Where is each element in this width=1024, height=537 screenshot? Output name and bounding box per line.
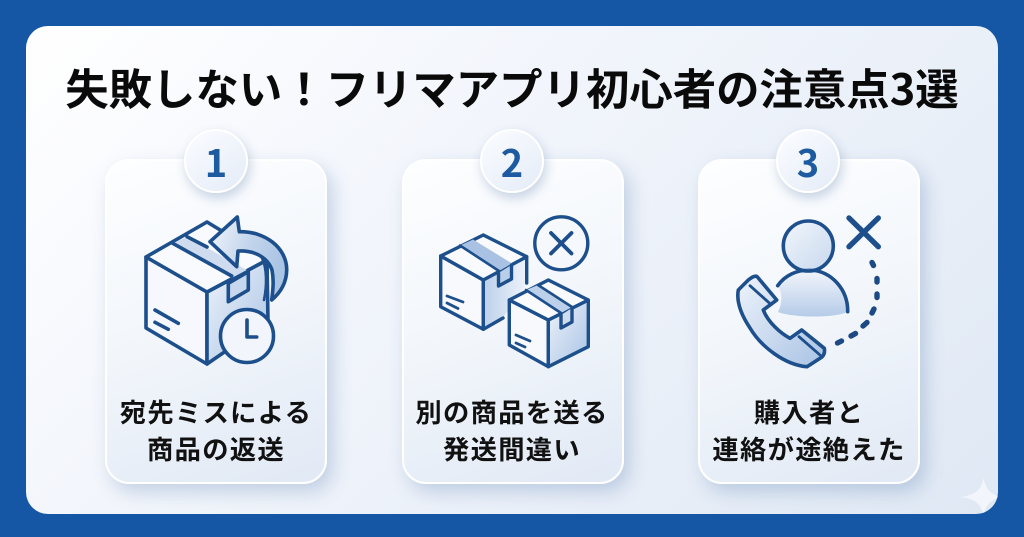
- front box: [509, 300, 548, 367]
- return arrow: [210, 217, 287, 300]
- number badge 2: [480, 129, 544, 193]
- number badge 2: 2: [501, 133, 523, 188]
- title: 失敗しない！フリマアプリ初心者の注意点3選: [65, 56, 959, 118]
- icon: returned box with clock: [146, 217, 287, 364]
- card 3 label: 購入者と: [754, 391, 864, 430]
- card 1 label: 宛先ミスによる: [120, 391, 312, 430]
- box tape tab: [228, 272, 248, 302]
- icon: person, phone and broken link: [738, 218, 878, 367]
- card 3 label: 連絡が途絶えた: [712, 428, 906, 467]
- cross mark: [849, 218, 878, 247]
- dotted path: [838, 262, 877, 343]
- card 1 label: 商品の返送: [147, 428, 285, 467]
- clock: [220, 310, 274, 362]
- person body: [778, 270, 848, 317]
- number badge 1: [184, 129, 248, 193]
- card 2 label: [415, 391, 609, 467]
- panel: card 1: [105, 159, 327, 484]
- box body: [146, 257, 207, 364]
- card 1 label: [120, 391, 312, 467]
- panel: card 3: [698, 159, 920, 484]
- cross circle: [535, 217, 588, 270]
- number badge 3: [776, 129, 840, 193]
- card 2 label: 別の商品を送る: [415, 391, 609, 430]
- card 2 label: 発送間違い: [443, 428, 581, 467]
- number badge 3: 3: [797, 133, 819, 188]
- box tape: [173, 237, 247, 278]
- panel: card 2: [402, 159, 624, 484]
- card 3 label: [712, 391, 906, 467]
- person head: [783, 221, 833, 271]
- back box: [441, 256, 483, 329]
- icon: two boxes and cross: [441, 217, 588, 367]
- box label lines: [155, 310, 178, 329]
- telephone: [738, 276, 825, 367]
- number badge 1: 1: [205, 133, 227, 188]
